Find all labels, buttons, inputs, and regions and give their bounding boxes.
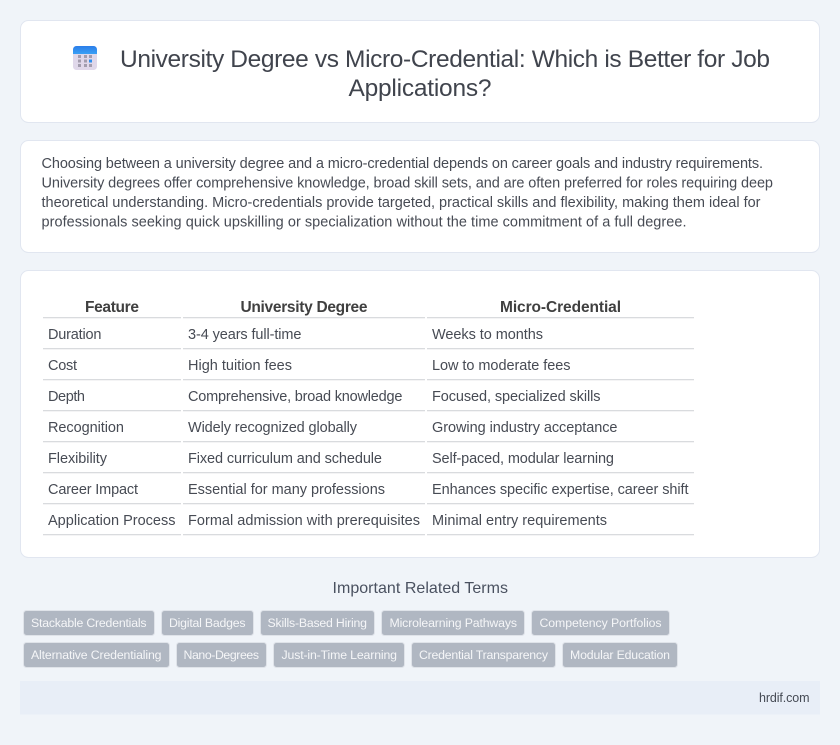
text block: introduction paragraph: theoretical understanding. Micro-credentials provide targeted, practical skills and flexibility, making them ideal for [42, 195, 761, 211]
table header: Feature [85, 299, 139, 316]
tag: stackable credentials: Stackable Credentials [31, 616, 146, 630]
icon: calendar [73, 46, 97, 70]
panel: comparison table [20, 270, 820, 558]
row: duration [48, 327, 543, 343]
tag: credential transparency: Credential Transparency [419, 648, 549, 662]
row: depth: Comprehensive, broad knowledge [188, 389, 402, 405]
footer source text: hrdif.com [759, 691, 810, 705]
row: flexibility: Fixed curriculum and schedule [188, 451, 382, 467]
text block: introduction paragraph: professionals seeking quick upskilling or specialization without the time commitment of a full degree. [42, 214, 686, 230]
tag: digital badges [162, 610, 254, 636]
row: cost: Cost [48, 358, 77, 374]
row: career impact: Essential for many professions [188, 482, 385, 498]
table header: Micro-Credential [500, 299, 621, 316]
row: depth: Depth [48, 389, 85, 405]
tag: nano-degrees [176, 642, 266, 668]
table header: University Degree [240, 299, 368, 316]
tag: modular education: Modular Education [570, 648, 670, 662]
row: career impact: Career Impact [48, 482, 138, 498]
row: application process [48, 513, 607, 529]
tags: related terms [24, 610, 678, 668]
row: cost: High tuition fees [188, 358, 292, 374]
row: duration: Duration [48, 327, 102, 343]
tag: alternative credentialing [24, 642, 170, 668]
row: recognition: Widely recognized globally [188, 420, 358, 436]
text block: introduction paragraph: University degrees offer comprehensive knowledge, broad skill sets, and are often preferred for roles requiring deep [42, 176, 773, 192]
row: depth: Focused, specialized skills [432, 389, 600, 405]
tag: modular education [562, 642, 678, 668]
row: duration: Weeks to months [432, 327, 543, 343]
row: career impact [48, 482, 688, 498]
row: recognition: Growing industry acceptance [432, 420, 618, 436]
tag: digital badges: Digital Badges [169, 616, 246, 630]
tag: just-in-time learning: Just-in-Time Learning [282, 648, 397, 662]
tag: skills-based hiring: Skills-Based Hiring [268, 616, 367, 630]
tag: stackable credentials [24, 610, 154, 636]
row: cost: Low to moderate fees [432, 358, 570, 374]
row: recognition [48, 420, 618, 436]
text block: introduction paragraph [42, 156, 773, 230]
panel: title header [20, 20, 820, 122]
tag: credential transparency [412, 642, 556, 668]
tag: nano-degrees: Nano-Degrees [184, 648, 259, 662]
tag: microlearning pathways: Microlearning Pathways [390, 616, 517, 630]
row: application process: Minimal entry requirements [432, 513, 607, 529]
row: application process: Formal admission with prerequisites [188, 513, 420, 529]
row: flexibility: Self-paced, modular learning [432, 451, 614, 467]
tag: competency portfolios [532, 610, 670, 636]
footer [20, 681, 820, 714]
title [120, 46, 770, 102]
tag: microlearning pathways [382, 610, 524, 636]
row: cost [48, 358, 570, 374]
title: University Degree vs Micro-Credential: Which is Better for Job [120, 46, 770, 73]
title: Applications? [348, 75, 492, 102]
row: application process: Application Process [48, 513, 176, 529]
panel: introduction [20, 140, 820, 252]
row: recognition: Recognition [48, 420, 124, 436]
row: career impact: Enhances specific expertise, career shift [432, 482, 688, 498]
tag: just-in-time learning [274, 642, 404, 668]
row: depth [48, 389, 600, 405]
row: flexibility [48, 451, 614, 467]
tag: skills-based hiring [260, 610, 374, 636]
row: duration: 3-4 years full-time [188, 327, 302, 343]
row: flexibility: Flexibility [48, 451, 108, 467]
text block: introduction paragraph: Choosing between a university degree and a micro-credential depends on career goals and industry requirements. [42, 156, 763, 172]
heading: important related terms: Important Related Terms [332, 580, 508, 597]
tag: alternative credentialing: Alternative Credentialing [31, 648, 162, 662]
tag: competency portfolios: Competency Portfolios [540, 616, 662, 630]
table header [85, 299, 621, 316]
